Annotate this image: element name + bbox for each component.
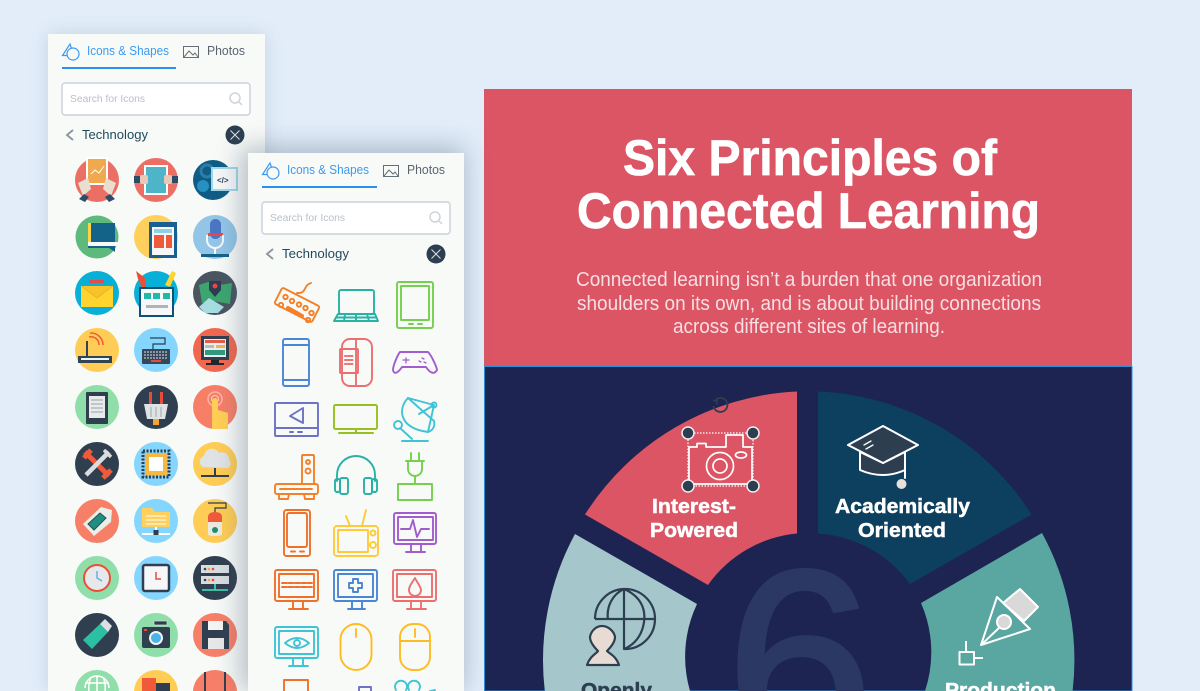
icon: antennas bbox=[193, 670, 237, 691]
icon: mouse bbox=[193, 499, 237, 543]
title bbox=[577, 130, 1040, 239]
category heading: Technology bbox=[82, 127, 148, 142]
icon: mouse outline bbox=[340, 624, 372, 670]
icon: square clock bbox=[134, 556, 178, 600]
label: Interest- bbox=[652, 495, 736, 518]
rotate handle bbox=[713, 398, 727, 412]
selection handles bbox=[682, 427, 759, 492]
icon: tablet chart bbox=[75, 158, 119, 202]
header panel bbox=[484, 89, 1132, 366]
segment: interest-powered bbox=[585, 392, 797, 585]
icon: keyboard bbox=[134, 328, 178, 372]
infographic card bbox=[484, 89, 1132, 691]
icon: tools bbox=[75, 442, 119, 486]
label: Academically bbox=[835, 495, 971, 518]
icon: text monitor outline bbox=[275, 570, 318, 609]
icon: game controller outline bbox=[393, 352, 437, 373]
icon: map bbox=[193, 271, 237, 315]
icon: wall clock bbox=[75, 556, 119, 600]
icon: memory tag bbox=[75, 499, 119, 543]
search box bbox=[262, 202, 450, 234]
intro text bbox=[576, 269, 1042, 338]
icon: tablet outline bbox=[397, 282, 433, 328]
label bbox=[835, 495, 971, 542]
tab: icons and shapes: Icons & Shapes bbox=[87, 44, 169, 58]
icon: keyboard outline bbox=[274, 283, 320, 323]
tab: photos bbox=[184, 44, 245, 58]
icon: usb stick bbox=[75, 613, 119, 657]
icon: headphones outline bbox=[335, 456, 377, 494]
globe and person icon bbox=[587, 589, 655, 665]
outline icon grid bbox=[274, 282, 437, 691]
icon: power plug outline bbox=[398, 453, 432, 500]
icon: floppy disk bbox=[193, 613, 237, 657]
icon: water drop monitor outline bbox=[393, 570, 436, 609]
icon: film bbox=[134, 670, 178, 691]
panel: outline icon library bbox=[240, 147, 464, 691]
icon: partial circles outline bbox=[395, 681, 435, 691]
category heading: Technology bbox=[282, 246, 349, 261]
segment: production-centered bbox=[921, 533, 1074, 691]
icon: plug bbox=[134, 385, 178, 429]
icon: microphone bbox=[193, 215, 237, 259]
icon: eye monitor outline bbox=[275, 627, 318, 666]
icon: satellite dish outline bbox=[394, 398, 436, 441]
icon: code window: </> bbox=[217, 176, 229, 185]
icon: touch finger bbox=[193, 385, 237, 429]
flat icon grid bbox=[75, 158, 237, 691]
search box bbox=[62, 83, 250, 115]
tab: icons and shapes bbox=[62, 44, 176, 69]
icon: smart watch outline bbox=[340, 339, 372, 386]
intro text: shoulders on its own, and is about building connections bbox=[577, 293, 1041, 315]
segment: academically oriented bbox=[818, 392, 1032, 584]
category heading bbox=[67, 126, 244, 144]
icon: camera bbox=[134, 613, 178, 657]
dark panel bbox=[484, 366, 1132, 691]
intro text: Connected learning isn’t a burden that one organization bbox=[576, 269, 1042, 291]
tab: photos: Photos bbox=[407, 163, 445, 177]
icon: chat bubbles bbox=[76, 216, 119, 258]
icon: envelope bbox=[75, 271, 119, 315]
icon: router bbox=[75, 328, 119, 372]
icon: chip bbox=[134, 442, 178, 486]
graduation cap icon bbox=[848, 426, 918, 489]
pen tool icon bbox=[960, 589, 1038, 664]
icon: smartphone outline bbox=[284, 510, 310, 556]
icon: e-reader bbox=[75, 385, 119, 429]
title: Six Principles of bbox=[623, 130, 997, 186]
icon: partial square outline bbox=[284, 680, 308, 691]
label bbox=[650, 495, 738, 542]
segment: openly networked bbox=[543, 534, 697, 691]
icon: medical monitor outline bbox=[334, 570, 377, 609]
tab: photos: Photos bbox=[207, 44, 245, 58]
icon: partial device outline bbox=[359, 687, 371, 691]
icon: retro tv outline bbox=[334, 510, 378, 556]
icon: phone outline bbox=[283, 339, 309, 386]
icon: cloud network bbox=[193, 442, 237, 486]
label: Powered bbox=[650, 519, 738, 542]
icon: monitor bbox=[193, 328, 237, 372]
camera icon bbox=[688, 433, 753, 486]
icon: code window bbox=[193, 160, 237, 200]
label: Oriented bbox=[858, 519, 946, 542]
panel: flat icon library bbox=[48, 34, 265, 691]
icon: television outline bbox=[334, 405, 377, 433]
icon: web tools bbox=[134, 271, 178, 316]
tab: photos bbox=[384, 163, 445, 177]
icon: document layout bbox=[134, 215, 178, 259]
icon: two button mouse outline bbox=[400, 624, 430, 670]
icon: tablet device outline bbox=[275, 403, 318, 436]
search box: Search for Icons bbox=[270, 212, 345, 224]
icon: heartbeat monitor outline bbox=[394, 513, 436, 552]
tab: icons and shapes: Icons & Shapes bbox=[287, 163, 369, 177]
search box: Search for Icons bbox=[70, 93, 145, 105]
icon: globe bbox=[75, 670, 119, 691]
icon: server bbox=[193, 556, 237, 600]
icon: router outline bbox=[275, 455, 318, 499]
icon: tablet hands bbox=[134, 158, 178, 202]
title: Connected Learning bbox=[577, 183, 1040, 239]
icon: laptop outline bbox=[334, 290, 378, 321]
intro text: across different sites of learning. bbox=[673, 316, 945, 338]
icon: network folder bbox=[134, 499, 178, 543]
tab: icons and shapes bbox=[262, 163, 377, 188]
category heading bbox=[267, 244, 446, 264]
